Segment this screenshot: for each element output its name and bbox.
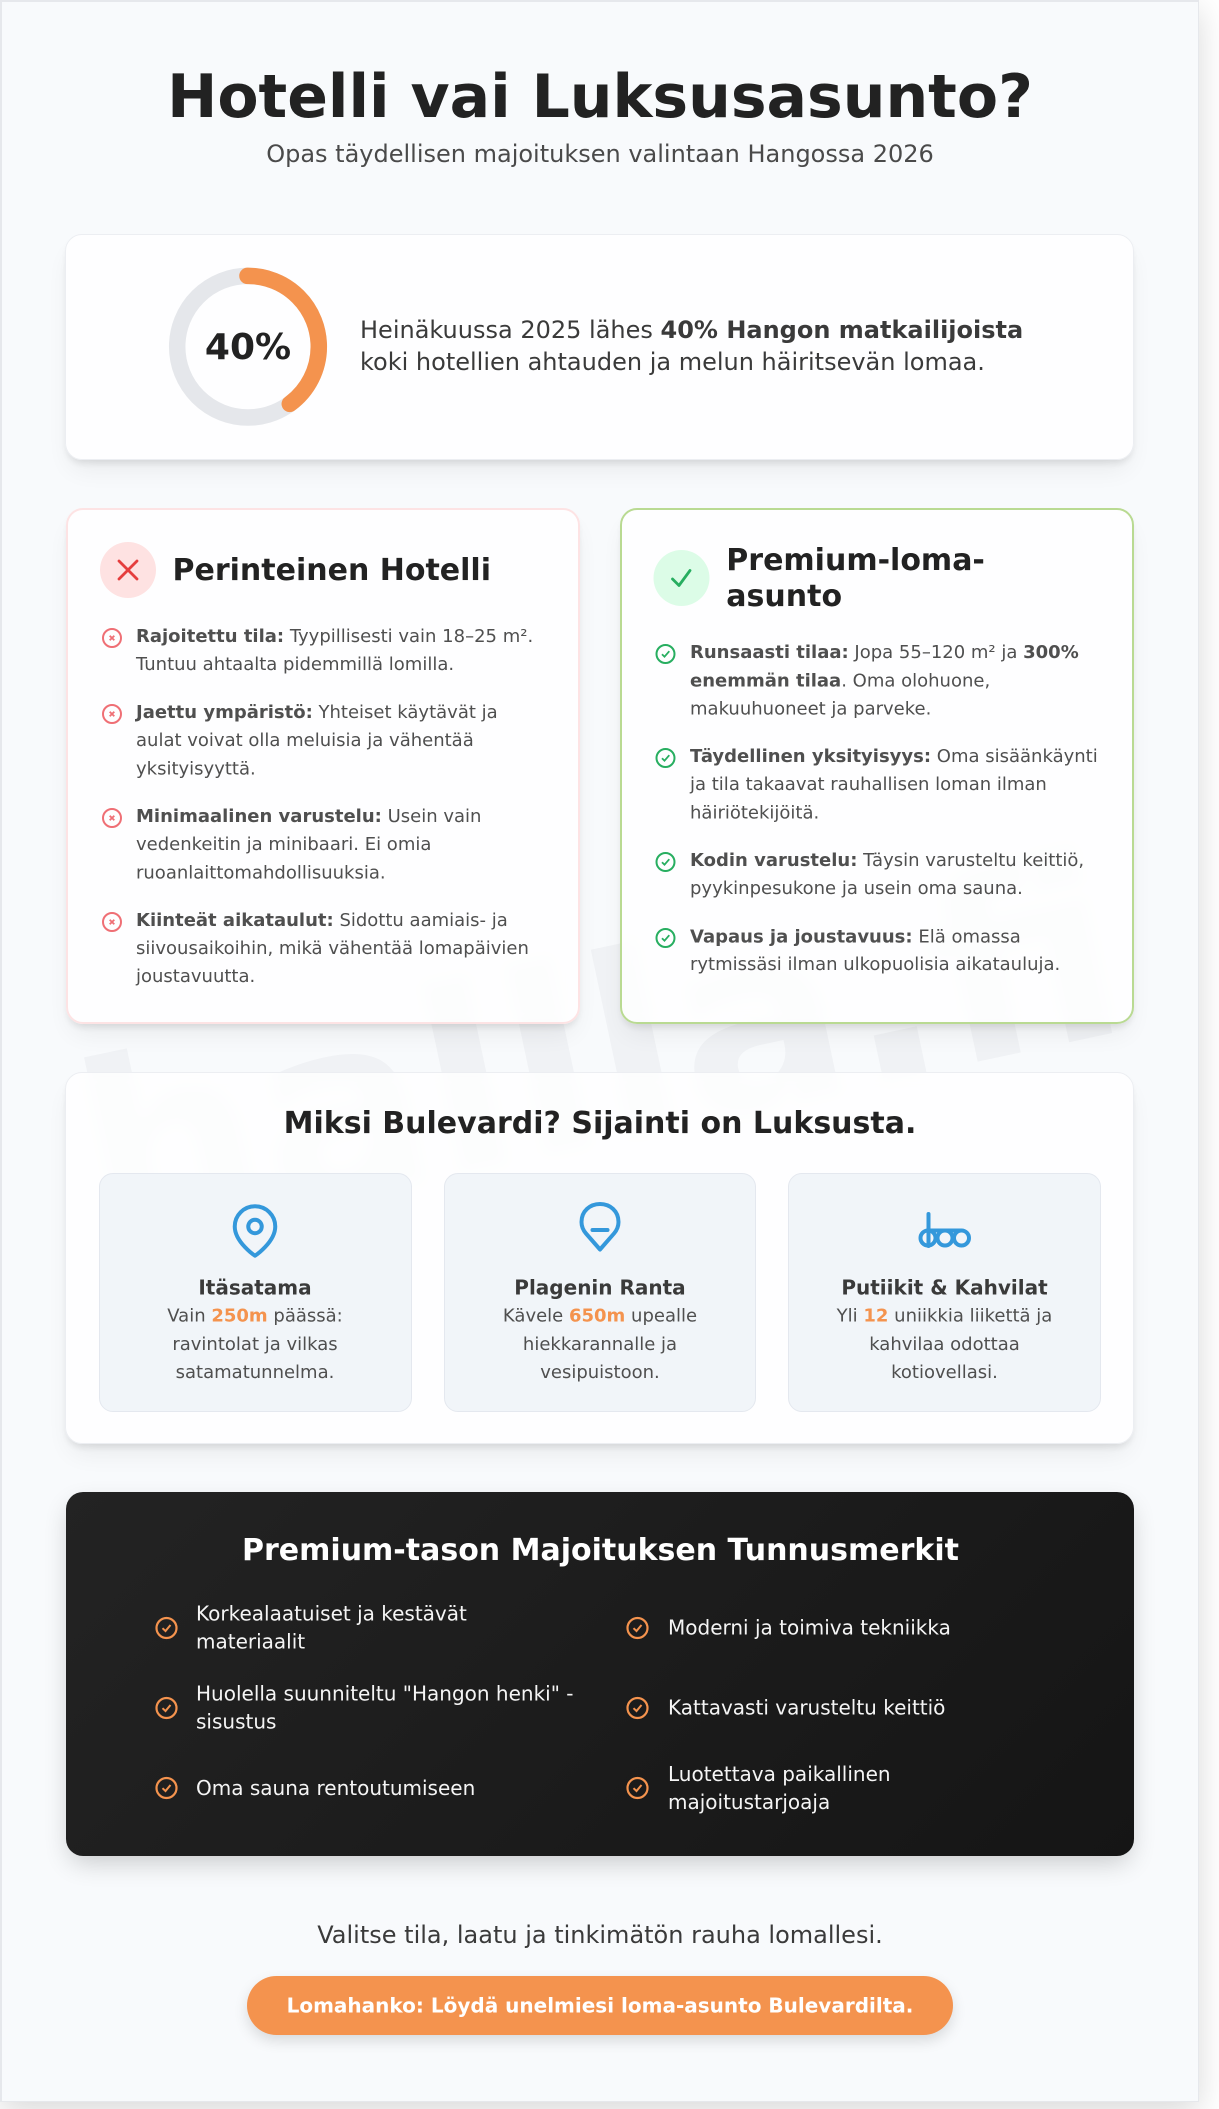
text: boutiques: Putiikit & Kahvilat: [841, 1276, 1048, 1300]
heading: premium apartment: asunto: [726, 579, 842, 614]
item: materials: [156, 1602, 467, 1654]
item: home equipment: pyykinpesukone ja usein oma sauna.: [690, 878, 1023, 899]
text: beach: Kävele 650m upealle: [503, 1306, 697, 1326]
item: minimal equipment: Minimaalinen varustelu: Usein vain: [136, 806, 481, 827]
donut chart: 40%: [177, 276, 319, 418]
text: beach: [503, 1276, 697, 1383]
list: apartment benefits: [656, 642, 1098, 975]
icon: map pin: [235, 1206, 275, 1256]
item: plenty of space: enemmän tilaa. Oma olohuone,: [690, 670, 990, 692]
text: harbour: satamatunnelma.: [176, 1362, 334, 1383]
panel: statistic: [65, 234, 1134, 460]
item: fixed schedules: [103, 910, 529, 987]
panel: location: [65, 1072, 1134, 1444]
text: boutiques: kahvilaa odottaa: [869, 1334, 1020, 1355]
heading: premium apartment: [726, 543, 985, 614]
heading: premium apartment: Premium-loma-: [726, 543, 985, 578]
watermark: hallla.fi: [55, 802, 1145, 1305]
item: minimal equipment: ruoanlaittomahdollisuuksia.: [136, 862, 386, 884]
item: local provider: [627, 1762, 890, 1814]
item: plenty of space: Runsaasti tilaa: Jopa 55–120 m² ja 300%: [690, 642, 1079, 663]
item: limited space: Rajoitettu tila: Tyypillisesti vain 18–25 m².: [136, 626, 533, 647]
donut chart: 40%: 40%: [205, 327, 291, 368]
card: boutiques: [788, 1173, 1101, 1412]
text: boutiques: [836, 1276, 1052, 1383]
item: interior: Huolella suunniteltu "Hangon henki" -: [196, 1682, 573, 1706]
item: materials: Korkealaatuiset ja kestävät: [196, 1602, 467, 1626]
item: home equipment: [656, 850, 1084, 899]
item: fixed schedules: siivousaikoihin, mikä vähentää lomapäivien: [136, 938, 529, 959]
statistic text: Heinäkuussa 2025 lähes 40% Hangon matkailijoista: [360, 316, 1023, 344]
item: shared environment: Jaettu ympäristö: Yhteiset käytävät ja: [134, 702, 498, 723]
item: privacy: ja tila takaavat rauhallisen loman ilman: [689, 774, 1047, 795]
item: shared environment: aulat voivat olla meluisia ja vähentää: [136, 730, 474, 751]
call to action button: Lomahanko: Löydä unelmiesi loma-asunto Bulevardilta.: [287, 1994, 913, 2018]
panel: premium apartment: [620, 508, 1134, 1024]
heading: location: Miksi Bulevardi? Sijainti on Luksusta.: [284, 1106, 916, 1141]
item: shared environment: [103, 702, 498, 780]
item: local provider: majoitustarjoaja: [668, 1790, 830, 1814]
item: privacy: Täydellinen yksityisyys: Oma sisäänkäynti: [690, 746, 1098, 767]
item: freedom: rytmissäsi ilman ulkopuolisia aikatauluja.: [690, 954, 1060, 975]
statistic text: [360, 316, 1023, 376]
item: shared environment: yksityisyyttä.: [136, 758, 256, 780]
item: fixed schedules: joustavuutta.: [135, 966, 255, 987]
text: beach: Plagenin Ranta: [514, 1276, 686, 1300]
feature list: [156, 1602, 950, 1814]
heading: traditional hotel: Perinteinen Hotelli: [172, 553, 491, 588]
icon: green check: [654, 550, 710, 606]
heading: premium features: Premium-tason Majoituksen Tunnusmerkit: [242, 1533, 958, 1568]
item: interior: [156, 1682, 573, 1734]
text: boutiques: kotiovellasi.: [891, 1362, 998, 1383]
item: materials: materiaalit: [196, 1630, 305, 1654]
title: Hotelli vai Luksusasunto?: [167, 62, 1033, 132]
item: technology: Moderni ja toimiva tekniikka: [668, 1616, 950, 1640]
item: minimal equipment: [103, 806, 481, 884]
icon: red cross: [100, 542, 156, 598]
item: plenty of space: [656, 642, 1079, 720]
item: interior: sisustus: [196, 1710, 276, 1734]
item: privacy: [656, 746, 1098, 824]
item: limited space: [103, 626, 533, 675]
text: harbour: Vain 250m päässä:: [167, 1306, 343, 1326]
item: freedom: [656, 926, 1060, 975]
item: kitchen: Kattavasti varusteltu keittiö: [668, 1696, 945, 1720]
text: harbour: ravintolat ja vilkas: [172, 1334, 338, 1355]
list: hotel drawbacks: [103, 626, 533, 987]
panel: premium features: [66, 1492, 1134, 1856]
call to action button: [247, 1976, 953, 2035]
card: harbour: [99, 1173, 412, 1412]
item: home equipment: Kodin varustelu: Täysin varusteltu keittiö,: [690, 850, 1084, 871]
text: harbour: Itäsatama: [198, 1276, 312, 1300]
item: sauna: Oma sauna rentoutumiseen: [196, 1776, 475, 1800]
item: local provider: Luotettava paikallinen: [668, 1762, 890, 1786]
panel: traditional hotel: [66, 508, 580, 1024]
card: beach: [444, 1173, 756, 1412]
text: beach: hiekkarannalle ja: [523, 1334, 677, 1355]
text: boutiques: Yli 12 uniikkia liikettä ja: [836, 1306, 1052, 1326]
closing text: Valitse tila, laatu ja tinkimätön rauha lomallesi.: [317, 1921, 883, 1949]
item: plenty of space: makuuhuoneet ja parveke.: [690, 698, 931, 720]
icon: beach pin: [582, 1204, 618, 1250]
icon: shops: [920, 1214, 969, 1246]
statistic text: koki hotellien ahtauden ja melun häiritsevän lomaa.: [360, 348, 985, 376]
text: harbour: [167, 1276, 343, 1383]
text: beach: vesipuistoon.: [540, 1362, 660, 1383]
subtitle: Opas täydellisen majoituksen valintaan Hangossa 2026: [266, 140, 934, 168]
item: freedom: Vapaus ja joustavuus: Elä omassa: [690, 926, 1021, 948]
item: fixed schedules: Kiinteät aikataulut: Sidottu aamiais- ja: [136, 910, 508, 931]
item: privacy: häiriötekijöitä.: [690, 802, 819, 824]
item: minimal equipment: vedenkeitin ja minibaari. Ei omia: [136, 834, 431, 855]
item: limited space: Tuntuu ahtaalta pidemmillä lomilla.: [135, 654, 454, 675]
